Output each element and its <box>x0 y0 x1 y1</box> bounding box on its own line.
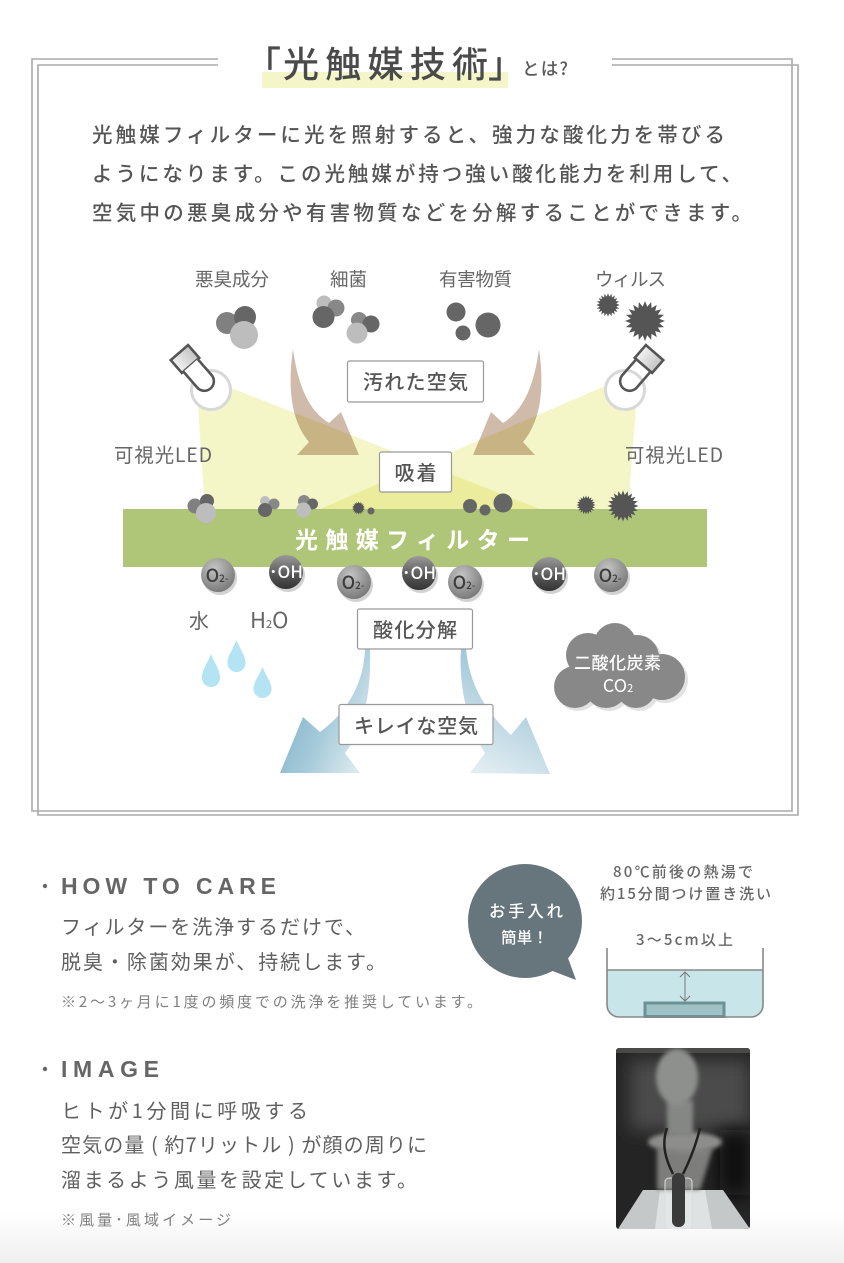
label: LED left: 可視光LED <box>114 439 212 468</box>
arrow: dirty air right <box>473 349 541 455</box>
box: oxidative decomposition <box>358 609 472 649</box>
box: clean air <box>339 704 493 744</box>
particles on filter <box>188 490 638 523</box>
icon: water drops <box>202 640 272 698</box>
box: clean air: キレイな空気 <box>354 710 478 739</box>
page bottom fade <box>0 1213 844 1263</box>
panel: double frame <box>32 59 798 815</box>
labels: pollutants <box>195 266 666 292</box>
intro text block: 光触媒フィルターに光を照射すると、強力な酸化力を帯びる <box>92 118 725 148</box>
title: 」 <box>488 36 524 88</box>
box: oxidative decomposition: 酸化分解 <box>373 614 457 643</box>
photo: mannequin with airflow <box>616 1048 750 1230</box>
icon: right LED lamp <box>606 345 663 410</box>
care instructions text <box>600 861 771 950</box>
labels: pollutants: ウィルス <box>595 266 666 292</box>
icon: harmful substance particles <box>446 302 500 340</box>
care instructions text: 3～5cm以上 <box>636 929 733 950</box>
label: water H2O <box>189 603 288 635</box>
photocatalyst filter bar: 光触媒フィルター <box>295 521 530 555</box>
title: 「 <box>245 36 281 88</box>
speech bubble: 簡単！ <box>501 926 548 948</box>
image text: 空気の量 ( 約7リットル ) が顔の周りに <box>61 1129 427 1158</box>
labels: pollutants: 細菌 <box>330 266 367 292</box>
care note: ※2～3ヶ月に1度の頻度での洗浄を推奨しています。 <box>61 991 482 1012</box>
photocatalyst filter bar <box>123 509 707 567</box>
molecule OH <box>532 557 568 594</box>
icon: CO2 cloud <box>554 623 688 711</box>
care instructions text: 80℃前後の熱湯で <box>613 861 753 882</box>
image note: ※風量･風域イメージ <box>61 1209 231 1230</box>
molecule OH <box>402 556 438 593</box>
label: LED right: 可視光LED <box>625 439 723 468</box>
molecule O2- <box>337 565 373 602</box>
box: adsorption: 吸着 <box>394 457 436 486</box>
molecule O2-: O2- <box>342 569 365 595</box>
section: image <box>43 1056 427 1230</box>
molecule O2- <box>594 558 630 595</box>
title: 光触媒技術 <box>283 36 488 88</box>
labels: pollutants: 有害物質 <box>439 266 512 292</box>
light beams <box>198 349 636 509</box>
box: dirty air: 汚れた空気 <box>363 366 468 395</box>
image text <box>61 1095 427 1193</box>
arrow: clean air right <box>461 649 550 774</box>
arrow: dirty air left <box>291 349 359 455</box>
molecule O2-: O2- <box>453 569 476 595</box>
molecule O2- <box>201 558 237 595</box>
heading: how to care: HOW TO CARE <box>61 873 276 899</box>
icon: left LED lamp <box>171 345 230 410</box>
icon: viruses <box>596 293 665 341</box>
icon: bacteria particles <box>312 296 380 344</box>
molecule OH: ･OH <box>532 560 566 585</box>
intro text block <box>92 118 752 226</box>
molecule O2- <box>448 565 484 602</box>
section: how to care <box>43 873 482 1012</box>
intro text block: 空気中の悪臭成分や有害物質などを分解することができます。 <box>92 196 752 226</box>
care text <box>61 911 386 975</box>
label: water H2O: 水 <box>189 605 209 634</box>
speech bubble: お手入れ <box>489 898 564 922</box>
care text: 脱臭・除菌効果が、持続します。 <box>61 946 386 975</box>
box: dirty air <box>348 361 484 402</box>
molecule OH: ･OH <box>402 559 436 584</box>
box: adsorption <box>380 452 452 492</box>
molecule OH <box>269 555 305 592</box>
molecule O2-: O2- <box>206 562 229 588</box>
icon: CO2 cloud: CO2 <box>603 672 633 698</box>
intro text block: ようになります。この光触媒が持つ強い酸化能力を利用して、 <box>92 157 742 187</box>
title: とは? <box>522 56 568 81</box>
label: water H2O: H2O <box>250 603 288 635</box>
molecule OH: ･OH <box>269 558 303 583</box>
image text: ヒトが1分間に呼吸する <box>61 1095 308 1124</box>
icon: odor particles <box>216 306 258 349</box>
image text: 溜まるよう風量を設定しています。 <box>61 1164 417 1193</box>
heading: image: IMAGE <box>61 1056 159 1082</box>
icon: wash basin <box>607 948 763 1017</box>
speech bubble <box>468 864 582 980</box>
title <box>245 36 568 88</box>
labels: pollutants: 悪臭成分 <box>195 266 269 292</box>
arrow: clean air left <box>280 649 370 773</box>
molecule O2-: O2- <box>599 562 622 588</box>
icon: CO2 cloud: 二酸化炭素 <box>574 649 661 674</box>
molecules <box>201 555 630 602</box>
care text: フィルターを洗浄するだけで、 <box>61 911 365 940</box>
care instructions text: 約15分間つけ置き洗い <box>600 883 771 904</box>
